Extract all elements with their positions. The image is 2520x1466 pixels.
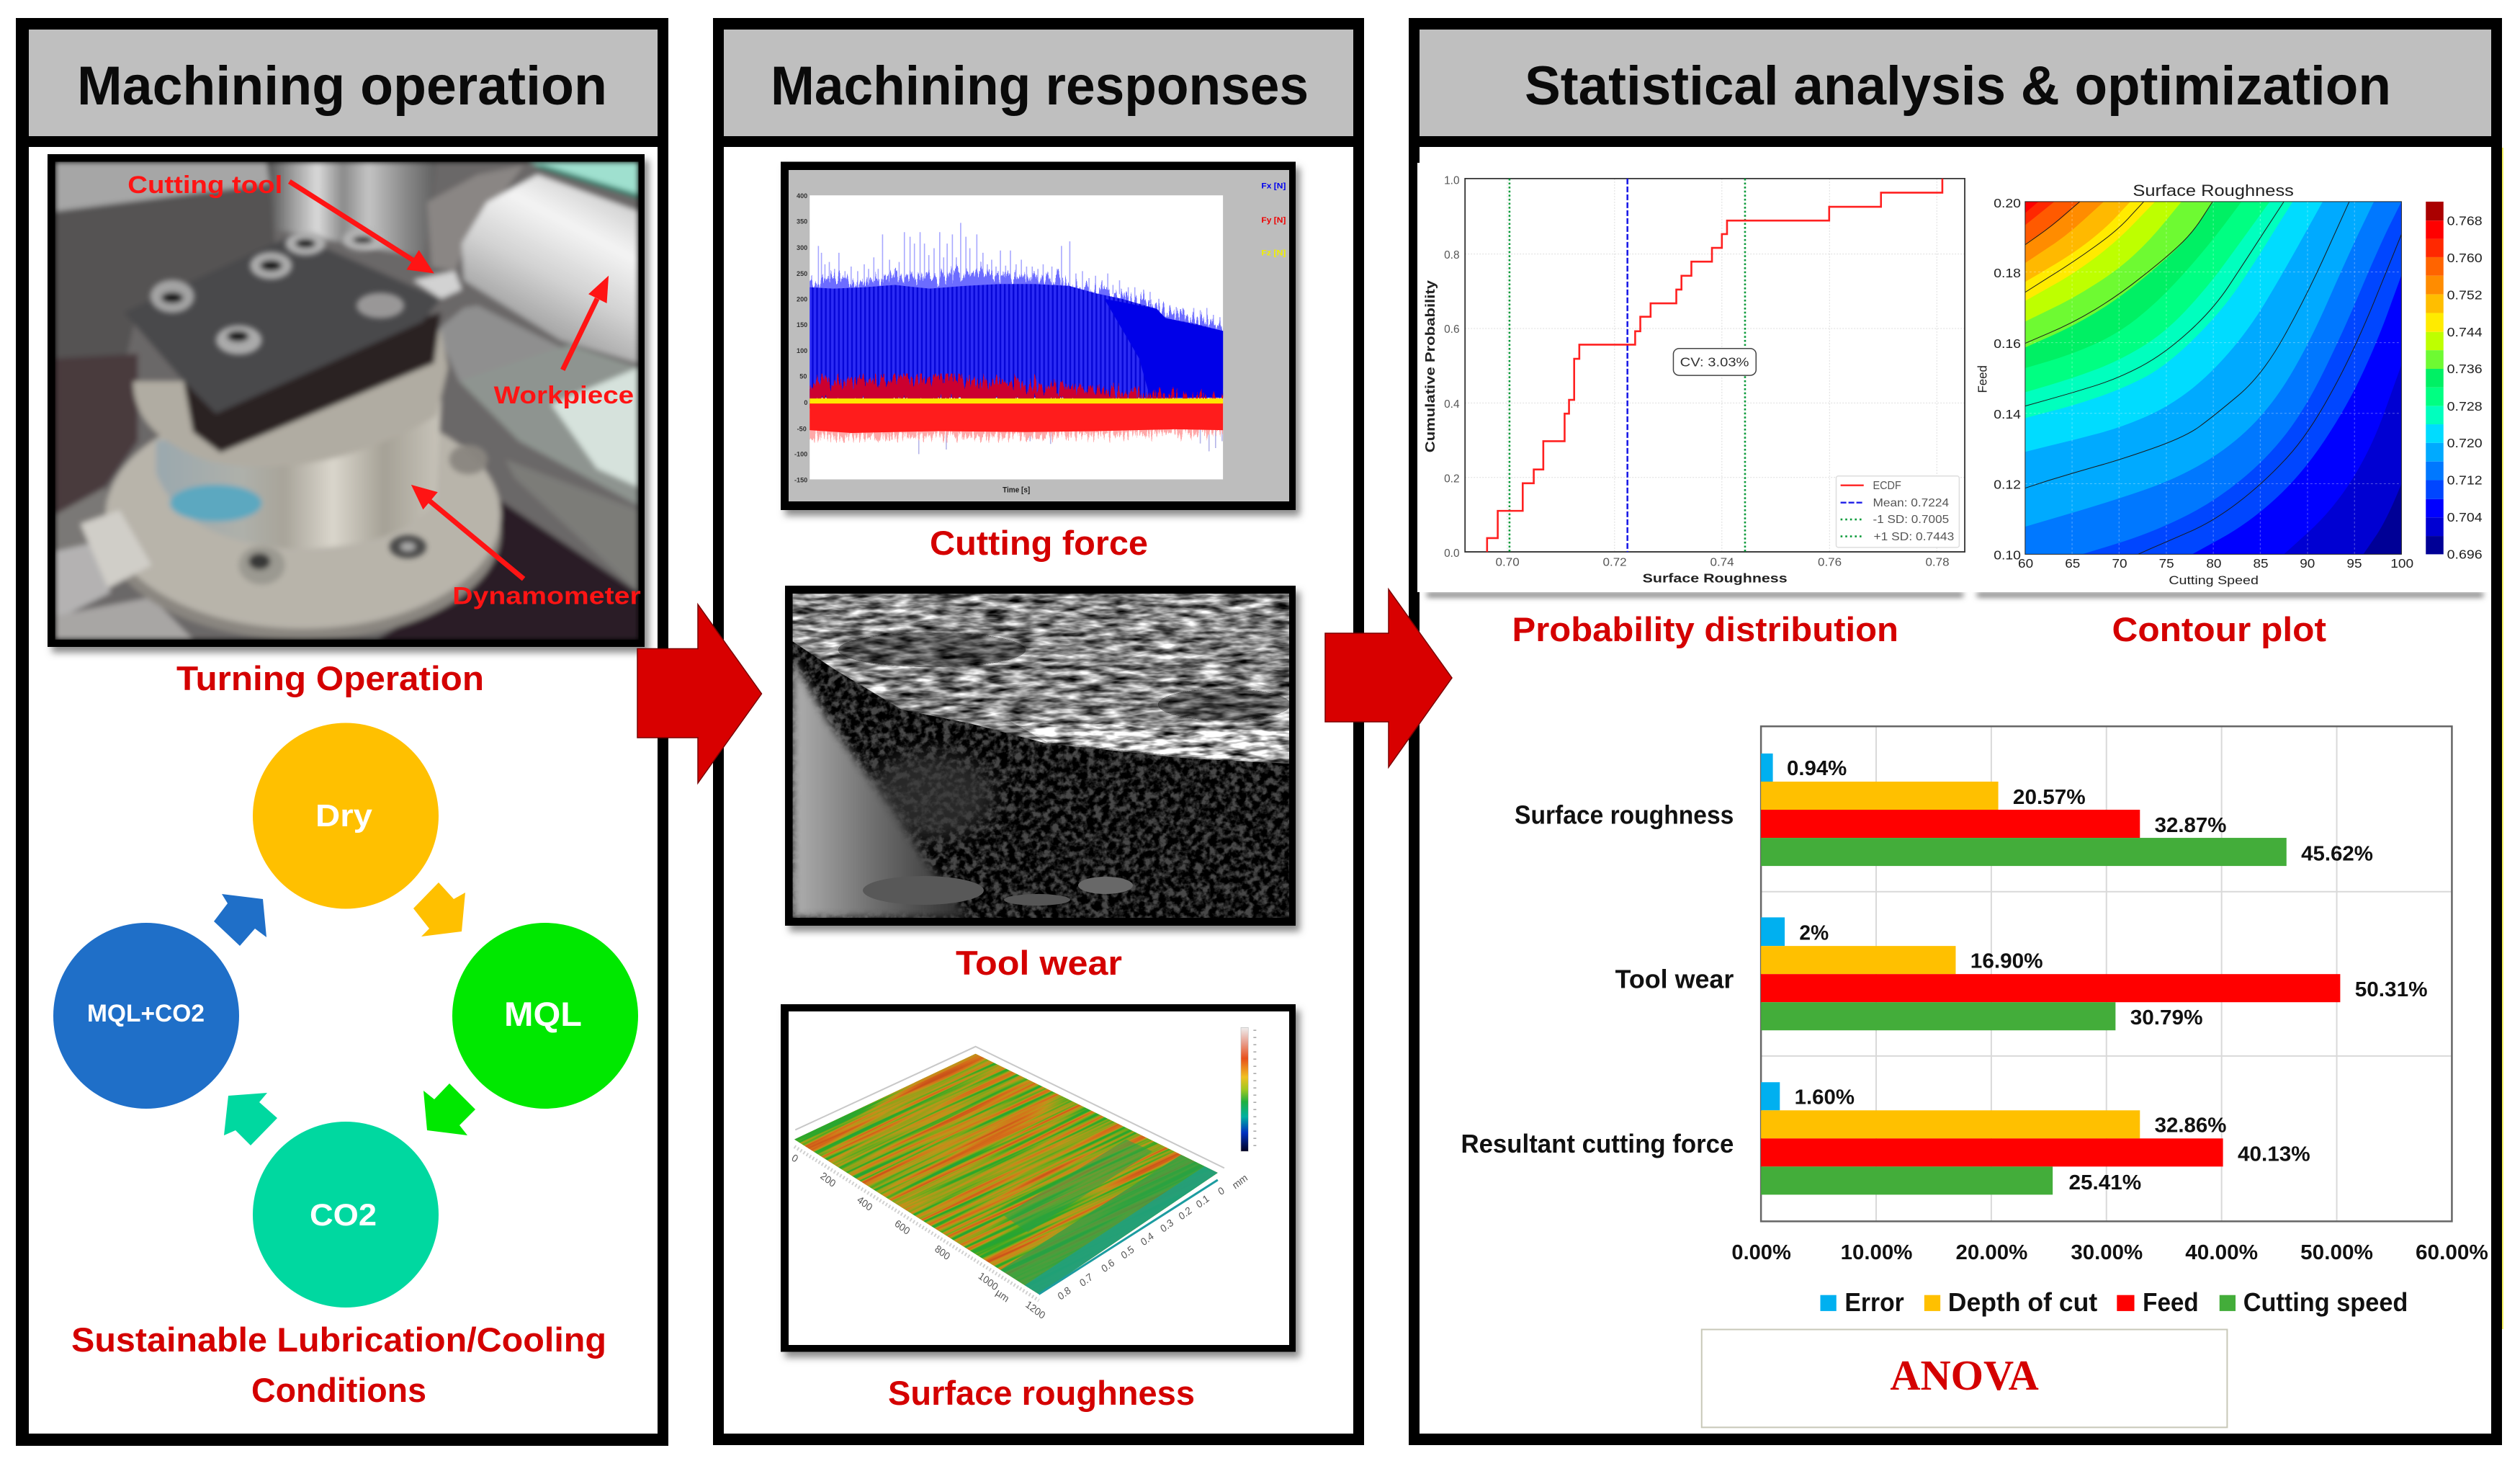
- chart: ANOVA contribution bars: [1461, 726, 2488, 1427]
- surface axis labels: 0: [790, 1151, 801, 1165]
- contour x axis ticks: 60: [2018, 556, 2033, 571]
- panel: machining responses: [713, 18, 1364, 1445]
- label: dynamometer: Dynamometer: [452, 583, 641, 610]
- contour x axis ticks: 95: [2346, 556, 2362, 571]
- contour colour bar: 0.712: [2447, 473, 2483, 488]
- category labels: Surface roughness: [1515, 801, 1734, 830]
- category labels: Tool wear: [1615, 965, 1734, 994]
- circle: CO2: [253, 1122, 439, 1308]
- contour colour bar: 0.720: [2447, 436, 2483, 450]
- y axis tick labels: [1444, 174, 1460, 560]
- force legend: Fx [N]: [1261, 182, 1286, 191]
- caption: contour plot: Contour plot: [2112, 610, 2326, 648]
- value labels: 32.86%: [2155, 1114, 2226, 1137]
- surface axis labels: 0.6: [1099, 1256, 1116, 1274]
- annotation: coefficient of variation: [1673, 349, 1756, 375]
- circle: MQL+CO2: MQL+CO2: [87, 1000, 205, 1027]
- contour y axis ticks: [1994, 196, 2021, 563]
- surface axis labels: 1200: [1023, 1298, 1048, 1321]
- panel: statistical analysis and optimization: [1409, 18, 2503, 1445]
- ECDF legend: -1 SD: 0.7005: [1873, 513, 1949, 526]
- caption box: ANOVA: [1702, 1329, 2227, 1427]
- x axis tick labels: 0.72: [1603, 556, 1627, 569]
- arrow: CO2 to MQL+CO2: [224, 1093, 277, 1145]
- x axis labels: 20.00%: [1955, 1241, 2027, 1264]
- contour y axis ticks: 0.14: [1994, 407, 2021, 421]
- yellow Fz signal: [810, 398, 1223, 403]
- legend: [1820, 1288, 2408, 1317]
- image frame: tool wear micrograph: [785, 586, 1296, 926]
- y axis tick labels: 0.4: [1444, 398, 1460, 411]
- x axis tick labels: 0.76: [1818, 556, 1842, 569]
- contour colour bar: 0.728: [2447, 399, 2483, 414]
- force y axis labels: [794, 192, 807, 483]
- annotation: coefficient of variation: CV: 3.03%: [1680, 354, 1749, 370]
- force y axis labels: -100: [794, 450, 807, 458]
- contour x axis ticks: 100: [2390, 556, 2413, 571]
- contour x axis title: Cutting Speed: [2169, 573, 2259, 587]
- arrow: MQL+CO2 to dry: [214, 894, 266, 946]
- value labels: 45.62%: [2301, 842, 2373, 865]
- caption box: ANOVA: ANOVA: [1890, 1351, 2039, 1399]
- force time series plot: [794, 182, 1286, 494]
- y axis tick labels: 0.0: [1444, 547, 1460, 560]
- contour y axis ticks: 0.18: [1994, 266, 2021, 280]
- legend: Error: [1844, 1288, 1904, 1317]
- surface axis labels: 0.4: [1139, 1230, 1156, 1248]
- heading: statistical analysis and optimization: Statistical analysis & optimization: [1525, 55, 2391, 117]
- cycle diagram: lubrication conditions: [53, 723, 638, 1308]
- y axis tick labels: 1.0: [1444, 174, 1460, 187]
- contour y axis title: Feed: [1976, 365, 1989, 393]
- contour x axis ticks: [2018, 556, 2413, 571]
- circle: dry: Dry: [315, 798, 373, 833]
- arrow: operation to responses: [637, 604, 762, 783]
- x axis labels: 10.00%: [1841, 1241, 1912, 1264]
- x axis tick labels: 0.74: [1710, 556, 1734, 569]
- contour colour bar: 0.768: [2447, 214, 2483, 228]
- contour title: Surface Roughness: [2133, 181, 2294, 200]
- surface axis labels: 0.1: [1194, 1192, 1211, 1210]
- contour y axis ticks: 0.10: [1994, 548, 2021, 563]
- label: workpiece: Workpiece: [494, 382, 634, 409]
- surface axis labels: 0: [1216, 1184, 1227, 1197]
- contour x axis ticks: 80: [2206, 556, 2222, 571]
- photo frame: turning setup: [48, 154, 645, 647]
- force y axis labels: -50: [797, 425, 807, 432]
- surface axis labels: 0.5: [1118, 1243, 1136, 1261]
- y axis tick labels: 0.2: [1444, 473, 1460, 485]
- legend: Feed: [2143, 1288, 2199, 1317]
- line: minus 1 SD: [1509, 179, 1510, 552]
- force y axis labels: 150: [797, 321, 807, 328]
- contour x axis ticks: 65: [2065, 556, 2080, 571]
- contour colour bar: [2426, 202, 2483, 562]
- value labels: 16.90%: [1970, 949, 2043, 973]
- x axis tick labels: [1496, 556, 1950, 569]
- ECDF legend: +1 SD: 0.7443: [1874, 530, 1954, 543]
- surface colour scale: [1241, 1027, 1255, 1151]
- header bar: machining responses: [724, 30, 1353, 136]
- surface axis labels: 400: [855, 1194, 875, 1213]
- bars: surface roughness: [1761, 754, 2287, 866]
- force y axis labels: 100: [797, 347, 807, 354]
- red Fy signal: [810, 377, 1223, 454]
- circle: MQL+CO2: [53, 923, 239, 1109]
- surface axis labels: 0.3: [1158, 1216, 1175, 1235]
- value labels: [1787, 756, 2428, 1194]
- value labels: 50.31%: [2355, 978, 2428, 1001]
- legend: Cutting speed: [2243, 1288, 2408, 1317]
- value labels: 1.60%: [1795, 1086, 1855, 1109]
- surface axis labels: 200: [819, 1169, 838, 1189]
- circle: MQL: MQL: [504, 995, 582, 1033]
- contour colour bar: 0.736: [2447, 362, 2483, 376]
- micrograph: worn tool edge: [792, 594, 1291, 918]
- chart frame: 3D surface roughness: [780, 1004, 1305, 1363]
- contour y axis ticks: 0.12: [1994, 478, 2021, 491]
- contour x axis ticks: 85: [2254, 556, 2269, 571]
- value labels: 20.57%: [2013, 785, 2086, 808]
- caption: surface roughness: Surface roughness: [888, 1374, 1195, 1412]
- caption: sustainable lubrication and cooling conditions: Sustainable Lubrication/Cooling: [71, 1320, 606, 1359]
- chart: ECDF probability distribution: [1417, 163, 1970, 592]
- force y axis labels: 250: [797, 270, 807, 277]
- panel: machining operation: [16, 18, 668, 1446]
- surface axis labels: 0.8: [1056, 1284, 1073, 1302]
- value labels: 40.13%: [2238, 1142, 2310, 1166]
- x axis tick labels: 0.70: [1496, 556, 1520, 569]
- force y axis labels: 0: [804, 399, 807, 406]
- force x axis label: Time [s]: [1003, 486, 1030, 494]
- surface axis labels: 800: [933, 1243, 952, 1262]
- caption: sustainable lubrication and cooling conditions: Conditions: [251, 1371, 426, 1409]
- arrow: cutting tool pointer: [290, 182, 434, 273]
- contour x axis ticks: 70: [2112, 556, 2127, 571]
- bars: tool wear: [1761, 917, 2340, 1030]
- header bar: machining operation: [29, 30, 658, 136]
- force y axis labels: 350: [797, 218, 807, 225]
- force legend: Fy [N]: [1261, 216, 1286, 225]
- force y axis labels: 200: [797, 295, 807, 303]
- x axis labels: 30.00%: [2071, 1241, 2143, 1264]
- heading: machining responses: Machining responses: [771, 55, 1309, 117]
- ECDF legend: Mean: 0.7224: [1873, 496, 1949, 509]
- contour x axis ticks: 90: [2300, 556, 2315, 571]
- arrow: responses to analysis: [1325, 589, 1452, 767]
- heading: machining operation: Machining operation: [77, 55, 607, 117]
- legend: Depth of cut: [1948, 1288, 2097, 1317]
- chart frame: cutting force signal: [781, 161, 1296, 510]
- y axis title: Cumulative Probability: [1422, 280, 1438, 452]
- arrow: dynamometer pointer: [411, 485, 524, 579]
- x axis title: Surface Roughness: [1643, 571, 1788, 586]
- x axis labels: 0.00%: [1731, 1241, 1791, 1264]
- x axis labels: 40.00%: [2185, 1241, 2258, 1264]
- surface axis labels: 0.2: [1176, 1204, 1194, 1223]
- contour colour bar: 0.752: [2447, 288, 2483, 302]
- surface axis labels: [790, 1151, 1250, 1321]
- caption: probability distribution: Probability distribution: [1512, 610, 1898, 648]
- line: plus 1 SD: [1744, 179, 1746, 552]
- surface axis labels: 0.7: [1077, 1271, 1095, 1289]
- value labels: 2%: [1799, 921, 1829, 944]
- arrow: workpiece pointer: [562, 276, 609, 370]
- surface axis labels: 600: [893, 1217, 913, 1237]
- label: cutting tool: Cutting tool: [127, 171, 282, 199]
- arrow: dry to MQL: [413, 882, 465, 937]
- contour filled bands: [2025, 202, 2401, 554]
- ECDF legend: [1836, 476, 1959, 547]
- circle: MQL: [452, 923, 638, 1109]
- chart: surface roughness contour plot: [1971, 163, 2491, 592]
- x axis labels: 50.00%: [2300, 1241, 2373, 1264]
- force y axis labels: 300: [797, 244, 807, 251]
- contour x axis ticks: 75: [2159, 556, 2174, 571]
- surface axis labels: mm: [1230, 1171, 1250, 1192]
- arrow: MQL to CO2: [423, 1083, 475, 1135]
- surface axis labels: µm: [994, 1286, 1011, 1305]
- x axis labels: 60.00%: [2416, 1241, 2488, 1264]
- caption: sustainable lubrication and cooling conditions: [71, 1320, 606, 1409]
- force legend: Fz [N]: [1261, 249, 1286, 258]
- value labels: 32.87%: [2155, 813, 2226, 836]
- bars: resultant cutting force: [1761, 1082, 2223, 1194]
- x axis labels: [1731, 1241, 2488, 1264]
- photo: dynamometer on lathe: [55, 162, 641, 640]
- circle: dry: [253, 723, 439, 909]
- force y axis labels: 50: [799, 373, 807, 380]
- header bar: statistical analysis: [1420, 30, 2491, 136]
- caption: cutting force: Cutting force: [930, 524, 1148, 562]
- force y axis labels: 400: [797, 192, 807, 200]
- value labels: 30.79%: [2130, 1006, 2202, 1029]
- force y axis labels: -150: [794, 476, 807, 483]
- value labels: 0.94%: [1787, 756, 1847, 780]
- contour colour bar: 0.704: [2447, 510, 2483, 524]
- ECDF legend: ECDF: [1873, 479, 1901, 492]
- blue Fx signal: [810, 223, 1223, 398]
- caption: turning operation: Turning Operation: [176, 659, 484, 697]
- category labels: Resultant cutting force: [1461, 1130, 1734, 1158]
- contour y axis ticks: 0.16: [1994, 336, 2021, 351]
- value labels: 25.41%: [2068, 1171, 2141, 1194]
- line: ECDF: [1487, 179, 1942, 552]
- contour colour bar: 0.744: [2447, 325, 2483, 339]
- 3D surface map: [792, 1027, 1256, 1318]
- y axis tick labels: 0.6: [1444, 323, 1460, 336]
- contour colour bar: 0.760: [2447, 251, 2483, 265]
- y axis tick labels: 0.8: [1444, 249, 1460, 262]
- x axis tick labels: 0.78: [1925, 556, 1950, 569]
- surface axis labels: 1000: [977, 1269, 1000, 1293]
- force legend: [1261, 182, 1286, 258]
- line: mean: [1626, 179, 1628, 552]
- caption: tool wear: Tool wear: [956, 944, 1122, 982]
- circle: CO2: CO2: [310, 1198, 377, 1233]
- category labels: [1461, 801, 1734, 1158]
- contour colour bar: 0.696: [2447, 547, 2483, 562]
- contour y axis ticks: 0.20: [1994, 196, 2021, 210]
